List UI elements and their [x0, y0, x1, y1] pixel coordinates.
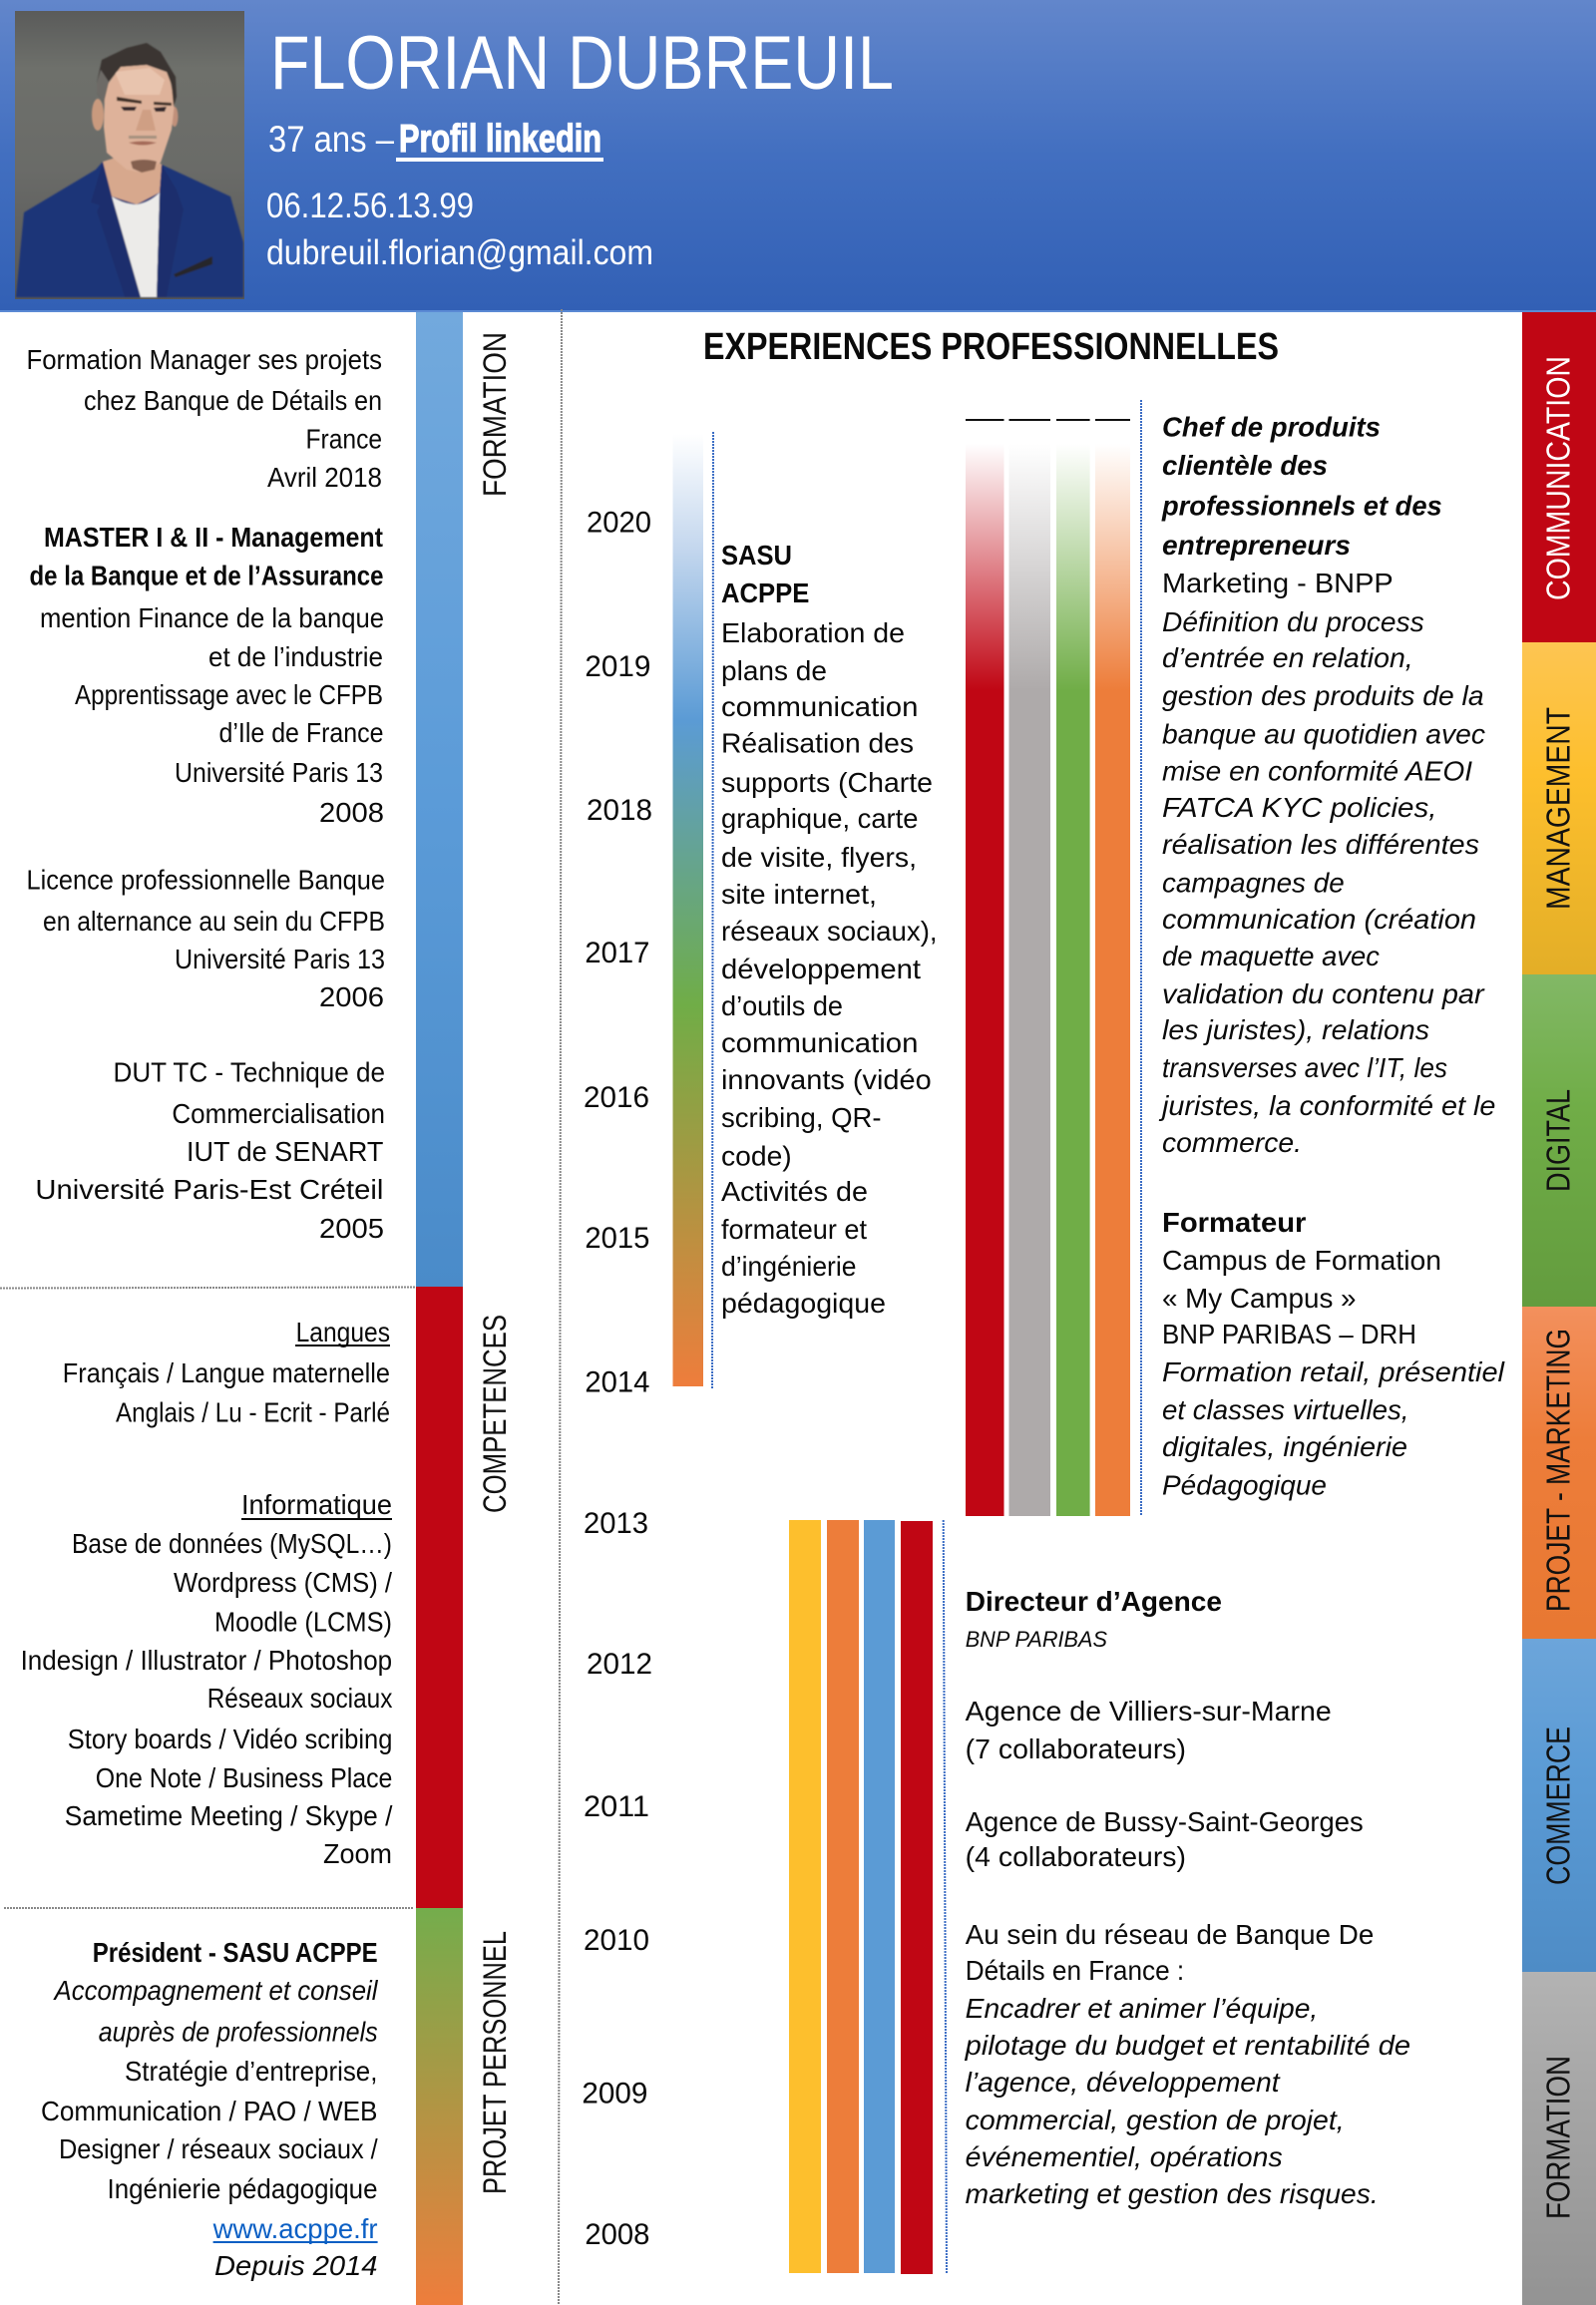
email: dubreuil.florian@gmail.com — [266, 233, 653, 272]
panel: skills text: Zoom — [323, 1838, 392, 1869]
experience: formateur: et classes virtuelles, — [1162, 1394, 1408, 1425]
experience: SASU ACPPE: SASU — [721, 540, 792, 571]
panel: personal project column bar — [416, 1908, 463, 2305]
panel: personal project text: auprès de professionnels — [99, 2017, 378, 2047]
experience: directeur d'agence: Détails en France : — [966, 1955, 1184, 1986]
timeline years — [582, 507, 652, 2251]
experience: chef de produits: clientèle des — [1162, 450, 1328, 481]
experience: SASU ACPPE: ACPPE — [721, 577, 809, 608]
experience: chef de produits: les juristes), relations — [1162, 1014, 1429, 1045]
panel: personal project text — [41, 1937, 378, 2281]
legend: projet marketing: PROJET - MARKETING — [1540, 1329, 1576, 1612]
timeline bars: directeur d'agence — [789, 1520, 947, 2274]
timeline bars: chef de produits and formateur — [966, 400, 1141, 1516]
legend: communication: COMMUNICATION — [1540, 356, 1576, 600]
panel: education text — [26, 344, 385, 1244]
panel: formation column bar — [416, 312, 463, 1287]
panel: skills text: Français / Langue maternelle — [63, 1357, 390, 1388]
linkedin link: Profil linkedin — [399, 118, 601, 161]
experience: chef de produits: gestion des produits de la — [1162, 680, 1484, 711]
timeline years: 2008 — [585, 2218, 649, 2251]
panel: education text: 2008 — [319, 797, 384, 828]
panel: education text: IUT de SENART — [187, 1136, 383, 1167]
panel: skills text: Sametime Meeting / Skype / — [65, 1800, 393, 1831]
phone: 06.12.56.13.99 — [266, 187, 474, 225]
experience: SASU ACPPE: site internet, — [721, 879, 877, 910]
experience: chef de produits: Définition du process — [1162, 606, 1424, 637]
panel: skills text: Story boards / Vidéo scribing — [68, 1724, 392, 1754]
experience: SASU ACPPE: de visite, flyers, — [721, 842, 917, 873]
experience: SASU ACPPE: Réalisation des — [721, 728, 914, 758]
timeline years: 2014 — [585, 1366, 649, 1398]
experience: formateur: BNP PARIBAS – DRH — [1162, 1319, 1416, 1349]
experience: chef de produits: banque au quotidien avec — [1162, 719, 1485, 750]
legend: digital: DIGITAL — [1540, 1089, 1576, 1192]
panel: education text: et de l’industrie — [208, 641, 383, 672]
legend: communication — [1522, 312, 1596, 642]
section label: projet personnel: PROJET PERSONNEL — [477, 1931, 513, 2194]
legend: digital — [1522, 974, 1596, 1307]
legend: projet marketing — [1522, 1307, 1596, 1639]
age: 37 ans – — [268, 119, 394, 160]
experience: SASU ACPPE: plans de — [721, 655, 827, 686]
experience: SASU ACPPE: communication — [721, 1027, 918, 1058]
panel: personal project text: Depuis 2014 — [214, 2250, 377, 2281]
panel: personal project text: Ingénierie pédagogique — [108, 2173, 377, 2204]
experience: chef de produits: professionnels et des — [1161, 491, 1442, 522]
experience: chef de produits: mise en conformité AEOI — [1162, 756, 1472, 786]
panel: personal project text: www.acppe.fr — [212, 2213, 378, 2244]
panel: education text: Université Paris-Est Créteil — [35, 1174, 383, 1205]
experience: chef de produits: entrepreneurs — [1162, 530, 1351, 561]
panel: education text: Commercialisation — [172, 1098, 385, 1129]
panel: personal project text: Designer / réseaux sociaux / — [59, 2133, 378, 2164]
panel: education text: Apprentissage avec le CFPB — [75, 679, 383, 710]
panel: skills text: Moodle (LCMS) — [214, 1606, 392, 1638]
experience: chef de produits: communication (création — [1162, 904, 1476, 935]
legend: management — [1522, 642, 1596, 974]
panel: education text: Université Paris 13 — [175, 944, 385, 974]
panel: personal project text: Président - SASU ACPPE — [93, 1937, 378, 1968]
experience: chef de produits: Chef de produits — [1162, 412, 1381, 443]
timeline years: 2013 — [584, 1507, 648, 1540]
experience: SASU ACPPE: communication — [721, 691, 918, 722]
experience: directeur d'agence: BNP PARIBAS — [966, 1627, 1107, 1652]
experience: SASU ACPPE: scribing, QR- — [721, 1102, 882, 1133]
timeline years: 2019 — [585, 650, 650, 683]
timeline years: 2012 — [587, 1648, 652, 1681]
experience: formateur: « My Campus » — [1162, 1283, 1357, 1314]
panel: education text: chez Banque de Détails en — [84, 385, 382, 416]
experience: formateur: Campus de Formation — [1162, 1245, 1441, 1276]
experience: formateur: Formateur — [1162, 1207, 1307, 1238]
panel: education text: Université Paris 13 — [175, 757, 383, 788]
panel: education text: France — [305, 423, 382, 455]
experience: formateur: Pédagogique — [1162, 1470, 1327, 1500]
panel: skills text: Anglais / Lu - Ecrit - Parlé — [116, 1396, 390, 1428]
panel: education text: d’Ile de France — [219, 717, 383, 748]
timeline years: 2016 — [584, 1081, 649, 1114]
experience: chef de produits: campagnes de — [1162, 868, 1345, 898]
experience: formateur — [1162, 1207, 1505, 1500]
experience: SASU ACPPE: supports (Charte — [721, 767, 933, 798]
experience: SASU ACPPE: formateur et — [721, 1214, 867, 1245]
experience: chef de produits: Marketing - BNPP — [1162, 568, 1394, 598]
experience: formateur: Formation retail, présentiel — [1162, 1356, 1505, 1387]
experience: SASU ACPPE: graphique, carte — [721, 803, 918, 834]
experience: chef de produits: validation du contenu par — [1162, 978, 1485, 1009]
experience: chef de produits: FATCA KYC policies, — [1162, 792, 1436, 823]
experience: directeur d'agence — [965, 1586, 1410, 2209]
timeline years: 2011 — [584, 1790, 649, 1823]
experience: SASU ACPPE: réseaux sociaux), — [721, 916, 938, 947]
experience: chef de produits: transverses avec l’IT, les — [1162, 1052, 1447, 1083]
panel: education text: de la Banque et de l’Assurance — [30, 561, 383, 590]
experience: SASU ACPPE: Elaboration de — [721, 617, 905, 648]
panel: personal project text: Communication / PAO / WEB — [41, 2096, 377, 2126]
panel: skills text: Réseaux sociaux — [207, 1683, 392, 1714]
experience: directeur d'agence: Encadrer et animer l’équipe, — [966, 1993, 1318, 2024]
panel: skills text: Informatique — [241, 1489, 392, 1520]
timeline years: 2015 — [585, 1222, 649, 1255]
name: FLORIAN DUBREUIL — [270, 21, 894, 106]
timeline years: 2017 — [585, 937, 649, 969]
experience: SASU ACPPE: Activités de — [721, 1176, 868, 1207]
experience: directeur d'agence: Agence de Bussy-Saint-Georges — [966, 1806, 1364, 1837]
experience: directeur d'agence: pilotage du budget et rentabilité de — [965, 2030, 1410, 2061]
section label: competences: COMPETENCES — [477, 1315, 513, 1513]
experience: directeur d'agence: commercial, gestion de projet, — [966, 2105, 1345, 2135]
panel: education text: DUT TC - Technique de — [114, 1057, 385, 1087]
legend: commerce: COMMERCE — [1540, 1727, 1576, 1885]
experience: chef de produits: commerce. — [1162, 1127, 1302, 1158]
panel: education text: Avril 2018 — [267, 462, 382, 493]
experience: SASU ACPPE: pédagogique — [721, 1288, 886, 1319]
experience: directeur d'agence: (4 collaborateurs) — [966, 1841, 1186, 1872]
experience: chef de produits: de maquette avec — [1162, 941, 1380, 971]
experience: directeur d'agence: marketing et gestion des risques. — [966, 2178, 1379, 2209]
panel: skills text — [21, 1317, 393, 1869]
experience: SASU ACPPE: code) — [721, 1141, 792, 1171]
panel: competences column bar — [416, 1287, 463, 1908]
section label: formation: FORMATION — [477, 332, 513, 497]
experience: directeur d'agence: Directeur d’Agence — [966, 1586, 1222, 1617]
title: experiences professionnelles: EXPERIENCES PROFESSIONNELLES — [703, 326, 1279, 368]
panel: education text: MASTER I & II - Management — [44, 522, 383, 553]
experience: SASU ACPPE: d’outils de — [721, 990, 843, 1021]
panel: skills text: One Note / Business Place — [96, 1762, 392, 1793]
legend: formation — [1522, 1972, 1596, 2305]
experience: chef de produits: d’entrée en relation, — [1162, 642, 1413, 673]
experience: SASU ACPPE: innovants (vidéo — [721, 1064, 932, 1095]
legend sidebar — [1522, 312, 1596, 2305]
experience: SASU ACPPE: d’ingénierie — [721, 1251, 856, 1282]
experience: SASU ACPPE — [721, 540, 938, 1319]
panel: skills text: Langues — [296, 1317, 390, 1347]
legend: management: MANAGEMENT — [1540, 707, 1576, 910]
panel: education text: Formation Manager ses projets — [26, 344, 382, 375]
timeline years: 2020 — [587, 507, 651, 539]
panel: education text: mention Finance de la banque — [40, 602, 384, 633]
experience: directeur d'agence: événementiel, opérations — [966, 2141, 1283, 2172]
experience: directeur d'agence: Agence de Villiers-sur-Marne — [966, 1696, 1332, 1727]
experience: chef de produits: juristes, la conformité et le — [1158, 1090, 1495, 1121]
experience: SASU ACPPE: développement — [721, 954, 921, 984]
panel: personal project text: Stratégie d’entreprise, — [125, 2056, 377, 2087]
experience: chef de produits — [1158, 412, 1495, 1158]
timeline years: 2018 — [587, 794, 652, 827]
panel: education text: 2006 — [319, 981, 384, 1012]
panel: skills text: Base de données (MySQL…) — [72, 1528, 392, 1559]
legend: commerce — [1522, 1639, 1596, 1972]
experience: directeur d'agence: (7 collaborateurs) — [966, 1733, 1186, 1764]
panel: personal project text: Accompagnement et conseil — [53, 1975, 378, 2006]
header banner — [0, 0, 1596, 312]
experience: directeur d'agence: l’agence, développement — [966, 2067, 1281, 2098]
panel: skills text: Wordpress (CMS) / — [174, 1567, 392, 1598]
portrait photo — [15, 11, 244, 299]
panel: education text: en alternance au sein du CFPB — [43, 906, 385, 937]
experience: formateur: digitales, ingénierie — [1162, 1431, 1407, 1462]
panel: skills text: Indesign / Illustrator / Photoshop — [21, 1645, 392, 1676]
timeline years: 2010 — [584, 1924, 649, 1957]
experience: chef de produits: réalisation les différentes — [1162, 829, 1479, 860]
experience: directeur d'agence: Au sein du réseau de Banque De — [966, 1919, 1374, 1950]
panel: education text: 2005 — [319, 1213, 384, 1244]
timeline years: 2009 — [582, 2077, 647, 2111]
panel: education text: Licence professionnelle Banque — [26, 864, 385, 896]
legend: formation: FORMATION — [1540, 2056, 1576, 2219]
timeline bar: SASU ACPPE — [672, 434, 703, 1386]
